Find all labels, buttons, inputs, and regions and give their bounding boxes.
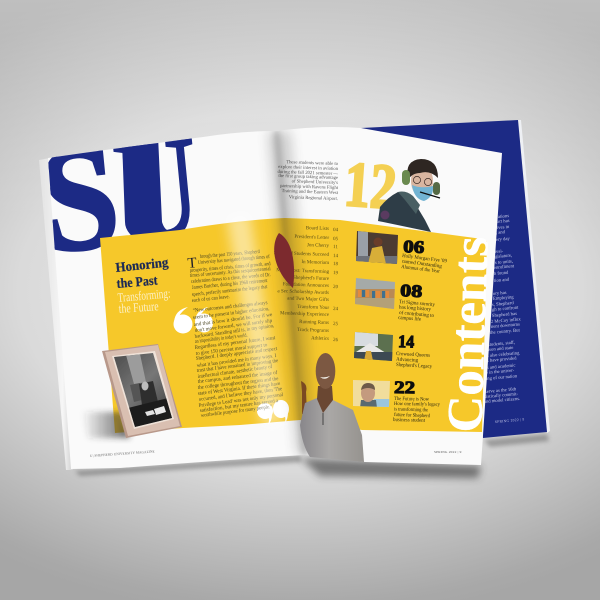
article text: celebration draws to a close, the words of Dr. bbox=[191, 271, 271, 285]
article text: state of West Virginia. If these things have bbox=[197, 380, 281, 397]
table of contents list: Transform Your bbox=[297, 305, 329, 311]
heading: Honoring the Past bbox=[115, 255, 169, 291]
item 14 description: Shepherd's Legacy bbox=[396, 362, 433, 370]
item 08 bbox=[355, 278, 435, 321]
back cover body text: tistically commit- bbox=[485, 392, 519, 400]
item 08 description: Tri Sigma sorority bbox=[399, 299, 436, 308]
back cover body text: ison and state bbox=[488, 346, 514, 353]
frame side bbox=[102, 344, 182, 438]
pilot jacket hood bbox=[398, 192, 420, 214]
article text: Privilege to Lead' was not only my personal bbox=[198, 392, 284, 409]
back cover body text: Employing bbox=[493, 295, 515, 302]
SU masthead letters bbox=[48, 138, 192, 252]
vertical Contents title: Contents bbox=[436, 236, 499, 433]
back cover page edge bbox=[518, 120, 550, 433]
article text: hrough the past 150 years, Shepherd bbox=[200, 249, 260, 260]
item 22 bbox=[353, 380, 440, 422]
back cover body text: ort has bbox=[497, 219, 510, 225]
back cover body text: e in the univer- bbox=[486, 368, 515, 376]
table of contents list: and Two Major Gifts bbox=[287, 297, 329, 303]
table of contents list: Shepherd Students Succeed bbox=[274, 251, 330, 258]
table of contents list: 24 bbox=[333, 307, 339, 312]
frame shadow bbox=[82, 412, 130, 438]
pilot jacket patch bbox=[380, 210, 390, 220]
number 14: 14 bbox=[398, 331, 415, 352]
panel: back cover bbox=[361, 120, 550, 438]
pilot hair bbox=[407, 159, 438, 180]
article text: the college throughout the region and the bbox=[198, 376, 279, 391]
man sweater bbox=[300, 398, 364, 462]
table of contents list: Track Programs bbox=[297, 328, 329, 334]
man neck bbox=[317, 386, 333, 413]
back cover body text: Shepherd has bbox=[492, 312, 517, 319]
table of contents list: Foundation Announces bbox=[283, 282, 329, 289]
back cover body text: 2 McCoy influx bbox=[491, 317, 522, 325]
back cover body text: ory has bbox=[493, 291, 507, 297]
intro caption: Training and the Eastern West bbox=[282, 189, 339, 196]
back cover blue panel bbox=[361, 120, 547, 438]
back cover body text: s, Shepherd bbox=[492, 301, 515, 308]
pilot glasses bbox=[413, 176, 432, 186]
article text: backward. Standing still is, in my opinion, bbox=[194, 323, 275, 340]
table of contents list: Shepherd's Future bbox=[293, 276, 330, 282]
subheading: Transforming the Future bbox=[117, 285, 171, 316]
article text: prosperity, times of crisis, times of growth, and bbox=[190, 260, 271, 274]
article text: intellectual climate, aesthetic beauty of bbox=[197, 363, 273, 380]
item 06 description bbox=[401, 253, 448, 275]
item 06 description: Alumnus of the Year bbox=[401, 263, 441, 275]
back cover body text: gislature, bbox=[495, 254, 512, 260]
panel: left page yellow content bbox=[90, 249, 289, 458]
table of contents list: a Sec Scholarship Awards bbox=[277, 289, 329, 296]
back cover body text: students, staff, bbox=[488, 341, 515, 348]
photo: pilot student bbox=[378, 159, 440, 232]
article text: and that is how it should be. For if we bbox=[193, 311, 273, 328]
intro caption: These students were able to bbox=[286, 160, 339, 167]
article text: occurred, and I believe they have, then 'The bbox=[198, 386, 283, 403]
heading: Honoring the Past: Honoring bbox=[115, 255, 169, 275]
article text: satisfaction, but my tenure has served a bbox=[199, 397, 279, 414]
spine and lighting effects bbox=[226, 131, 317, 455]
back cover body text: ing of our nation bbox=[486, 374, 518, 382]
article text: seem to be present in higher education, bbox=[193, 306, 270, 321]
table of contents list: 14 bbox=[333, 254, 339, 259]
back cover body text: serve as the 16th bbox=[485, 387, 517, 395]
intro caption: the first group taking advantage bbox=[278, 174, 338, 181]
table of contents list: 18 bbox=[333, 262, 339, 267]
subheading: Transforming the Future: the Future bbox=[118, 298, 159, 316]
intro caption: partnership with Ravens Flight bbox=[280, 184, 339, 191]
article text: what it has provided me in many ways. I bbox=[196, 353, 277, 369]
article text: an impossibility in today's world. bbox=[195, 333, 248, 345]
item 06 description: Holly Morgan Frye '09 bbox=[402, 253, 448, 265]
photo: Holly Morgan Frye bbox=[356, 231, 398, 264]
table of contents list: 05 bbox=[333, 237, 339, 242]
item 22 description: future for Shepherd bbox=[394, 411, 431, 419]
photo: Crowned Queens bbox=[354, 332, 393, 361]
pilot face mask bbox=[412, 185, 433, 201]
pilot headset bbox=[402, 170, 440, 195]
left page folio: 6 | SHEPHERD UNIVERSITY MAGAZINE bbox=[90, 449, 155, 458]
table of contents list: Jon Cherry bbox=[307, 243, 330, 249]
item 22 description: is transforming the bbox=[394, 406, 429, 413]
back cover body text: ives in bbox=[497, 225, 510, 231]
back cover body text: tion and bbox=[494, 278, 510, 284]
man smile bbox=[320, 376, 330, 379]
back cover body text: s also celebrating bbox=[487, 351, 520, 359]
man head bbox=[316, 353, 335, 389]
item 14 description: Crowned Queens bbox=[396, 351, 430, 359]
item 08 description: campus life bbox=[398, 314, 422, 323]
right page folio: SPRING 2022 | 9 bbox=[434, 450, 462, 454]
pilot flight jacket bbox=[378, 192, 431, 232]
back cover body text: gh to confront bbox=[492, 306, 519, 313]
item 08 description: of contributing to bbox=[399, 309, 435, 319]
palm plant behind man bbox=[301, 381, 307, 414]
article text: “New outcomes and challenges always bbox=[192, 299, 268, 314]
item 06 bbox=[356, 231, 447, 273]
table of contents list: Meant Lost: Transforming bbox=[276, 268, 330, 275]
item 14 bbox=[354, 332, 432, 369]
panel: right page contents bbox=[274, 148, 499, 454]
item 22 description: business student bbox=[393, 417, 426, 424]
man sweater zipper bbox=[322, 413, 324, 425]
frame mat bbox=[112, 351, 174, 429]
pilot neck and face bbox=[411, 165, 433, 197]
table of contents list: 20 bbox=[333, 285, 339, 290]
table of contents list: 25 bbox=[333, 322, 339, 327]
panel: white spread pages bbox=[48, 127, 502, 469]
table of contents list: Athletics bbox=[311, 336, 329, 342]
intro caption: of Shepherd University's bbox=[292, 179, 338, 186]
item 14 description bbox=[396, 351, 433, 370]
back cover body text: h found bbox=[494, 271, 509, 277]
frame face bbox=[105, 345, 180, 436]
table of contents list: Membership Experience bbox=[280, 311, 330, 318]
number 22: 22 bbox=[394, 377, 415, 397]
back cover body text: enrollment bbox=[494, 264, 515, 271]
back cover body text: s to units, bbox=[495, 259, 513, 266]
back cover body text: , and bbox=[496, 230, 506, 236]
icon: opening quotation mark bbox=[174, 307, 213, 334]
heading: Honoring the Past: the Past bbox=[116, 272, 159, 291]
article text: speech, perfectly summarize the legacy that bbox=[191, 283, 268, 298]
table of contents list: 26 bbox=[333, 338, 339, 343]
table of contents list: President's Letter bbox=[294, 235, 329, 241]
back cover body text: the country. But bbox=[490, 328, 521, 336]
subheading: Transforming the Future: Transforming: bbox=[117, 285, 171, 305]
back cover body text: s have provided bbox=[487, 356, 517, 364]
intro caption: Virginia Regional Airport. bbox=[289, 195, 338, 202]
historic black and white photo bbox=[114, 353, 172, 427]
table of contents list bbox=[274, 226, 339, 343]
number 08: 08 bbox=[400, 280, 423, 301]
intro caption bbox=[277, 160, 339, 202]
back cover folio: SPRING 2022 | 9 bbox=[495, 417, 525, 424]
item 06 description: named Outstanding bbox=[402, 259, 443, 270]
table of contents list: 11 bbox=[333, 245, 338, 250]
item 22 description: How one family's legacy bbox=[394, 400, 440, 408]
big page number 12: 12 bbox=[342, 148, 399, 223]
item 08 description bbox=[398, 299, 436, 323]
panel: yellow band across spread bbox=[100, 218, 487, 433]
back cover body text: and model citizens. bbox=[484, 397, 520, 405]
back cover body text: nent downturns bbox=[491, 322, 520, 330]
pilot headset microphone bbox=[420, 192, 440, 198]
framed photograph bbox=[82, 344, 182, 438]
left page block edge bbox=[39, 158, 73, 470]
intro caption: explore their interest in aviation bbox=[278, 165, 339, 172]
table of contents list: Board Lists bbox=[306, 226, 329, 232]
SU masthead letters: S bbox=[33, 112, 126, 285]
article text: don't move forward, we will surely slip bbox=[194, 317, 273, 334]
article text: James Butcher, during his 1968 retirement bbox=[192, 278, 268, 291]
back cover body text: s and academic bbox=[487, 364, 516, 371]
item 22 description: The Future is Now bbox=[394, 396, 429, 403]
article text: the campus, and enhanced the image of bbox=[197, 369, 278, 385]
number 06: 06 bbox=[403, 236, 425, 257]
back cover body text bbox=[484, 214, 522, 405]
item 22 description bbox=[393, 396, 440, 424]
intro caption: during the fall 2021 semester — bbox=[277, 170, 338, 177]
back cover body text: ations bbox=[498, 214, 510, 220]
back cover body text: ery day bbox=[496, 237, 511, 243]
item 14 description: Advancing bbox=[396, 357, 419, 364]
magazine drop shadow bbox=[75, 434, 549, 478]
article text: University has navigated through times of bbox=[198, 253, 270, 266]
table of contents list: 04 bbox=[333, 228, 339, 233]
table of contents list: In Memoriam bbox=[301, 260, 329, 266]
photo: man looking up bbox=[300, 353, 364, 462]
article text: each of us can leave. bbox=[191, 293, 230, 304]
article text: worthwhile purpose for many people.” bbox=[200, 403, 273, 419]
SU masthead letters: U bbox=[107, 104, 207, 277]
photo: business alumnus bbox=[353, 380, 390, 407]
article text: to give 150 percent moral support to bbox=[196, 342, 268, 357]
photo: Tri Sigma group bbox=[355, 278, 395, 309]
icon: closing quotation mark bbox=[257, 400, 289, 425]
drop cap: T bbox=[187, 255, 197, 272]
article text: Regardless of my personal future, I want bbox=[194, 334, 276, 351]
item 08 description: has long history bbox=[399, 305, 432, 313]
football illustration bbox=[274, 233, 294, 288]
table of contents list: 19 bbox=[333, 271, 339, 276]
back cover body text: resi- bbox=[495, 249, 504, 255]
article text: times of uncertainty. As this sesquicentennial bbox=[190, 265, 271, 279]
article text: Shepherd. I deeply appreciate and respect bbox=[196, 346, 278, 362]
table of contents list: Running Rams bbox=[299, 320, 329, 326]
article text bbox=[190, 249, 284, 419]
article text: trust that I have remained in improving the bbox=[197, 358, 279, 374]
